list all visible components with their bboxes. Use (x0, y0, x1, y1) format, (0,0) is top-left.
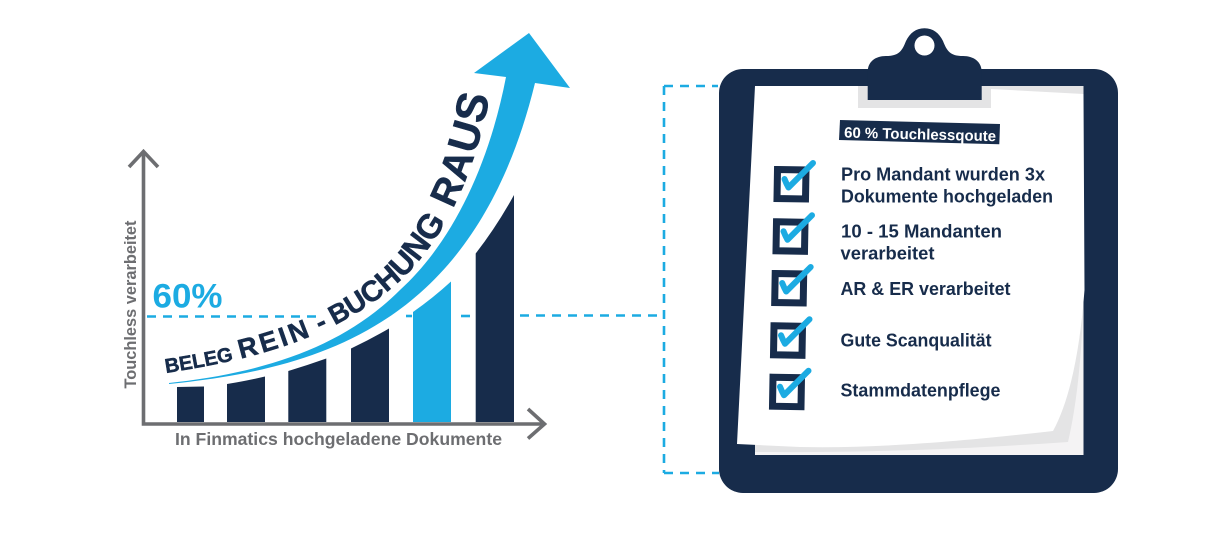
checklist item 1 (841, 164, 1053, 206)
curved slogan: - (317, 320, 326, 327)
panel: growth chart (121, 33, 570, 449)
curved slogan: BUCHUNG (327, 214, 443, 325)
growth arrow (169, 33, 570, 384)
clip (868, 28, 982, 100)
axes (129, 152, 545, 438)
checkbox 2 (776, 215, 812, 251)
clipboard board (719, 69, 1118, 493)
heading tag: 60 % Touchlessqoute (844, 125, 996, 145)
checklist item 2: 10 - 15 Mandanten (841, 222, 1002, 242)
y axis label: Touchless verarbeitet (121, 220, 140, 388)
checkbox 5 (772, 371, 808, 407)
curved slogan (164, 93, 488, 374)
paper stack back sheet (755, 86, 1084, 455)
panel: clipboard (719, 28, 1118, 493)
checklist item 1: Dokumente hochgeladen (841, 186, 1053, 206)
checklist item 2: verarbeitet (840, 244, 934, 264)
curved slogan: RAUS (430, 93, 488, 207)
checklist item 2 (840, 222, 1002, 264)
paper fold shadow (755, 86, 1084, 452)
curved slogan: REIN (237, 319, 310, 359)
checklist item 4: Gute Scanqualität (840, 330, 992, 350)
60 percent label: 60% (152, 278, 222, 316)
checkbox 3 (775, 267, 811, 303)
x axis label: In Finmatics hochgeladene Dokumente (175, 429, 502, 449)
checklist item 5: Stammdatenpflege (840, 380, 1000, 400)
curved slogan: BELEG (164, 348, 232, 374)
bar chart (177, 195, 514, 422)
checklist item 3: AR & ER verarbeitet (840, 279, 1010, 299)
checklist item 1: Pro Mandant wurden 3x (841, 164, 1045, 184)
checkbox 1 (777, 163, 813, 199)
checkbox 4 (774, 319, 810, 355)
connector: dashed line from chart to clipboard (147, 86, 719, 473)
white paper sheet (737, 86, 1084, 447)
